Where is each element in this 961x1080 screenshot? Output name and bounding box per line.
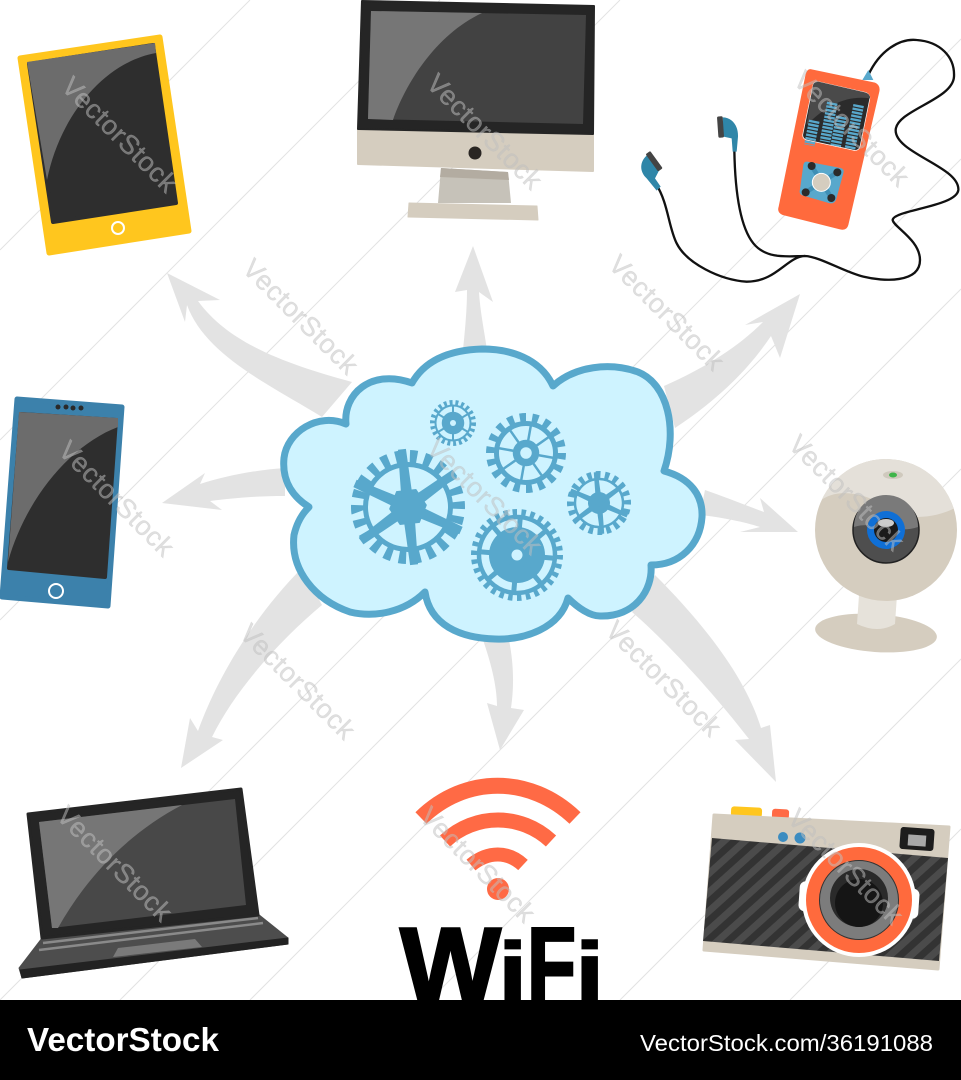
watermarks: VectorStock: [788, 65, 915, 193]
wifi text: i: [575, 926, 604, 1021]
watermarks: VectorStock: [414, 801, 541, 929]
watermarks: VectorStock: [600, 615, 727, 743]
footer logo text: VectorStock: [27, 1021, 220, 1058]
device: laptop: [19, 789, 288, 978]
watermarks: VectorStock: [234, 618, 361, 746]
footer image id: VectorStock.com/36191088: [640, 1030, 933, 1056]
arrow: to monitor: [455, 246, 493, 350]
device: camera: [703, 806, 949, 969]
footer bar: [0, 1000, 961, 1080]
watermarks: VectorStock: [603, 249, 730, 377]
watermarks: VectorStock: [56, 71, 183, 199]
cloud with gears: [284, 349, 702, 639]
wifi symbol and label: [400, 786, 604, 1025]
cloud shape: [284, 349, 702, 639]
wifi text: i: [498, 926, 528, 1021]
watermarks: VectorStock: [421, 68, 548, 196]
watermarks: VectorStock: [782, 803, 909, 931]
device: tablet: [20, 37, 189, 253]
arrow: to tablet: [167, 273, 352, 417]
gear: large: [349, 444, 467, 570]
watermarks: VectorStock: [53, 435, 180, 563]
arrow: to wifi: [483, 640, 524, 750]
arrow: to phone: [162, 468, 285, 510]
earbud left: [641, 155, 661, 191]
device: music player with earphones: [641, 40, 958, 282]
wifi waves: [421, 786, 575, 865]
gear: lower: [474, 512, 560, 598]
wifi text: W: [400, 905, 501, 1025]
watermarks: VectorStock: [421, 433, 548, 561]
arrow: to laptop: [181, 568, 322, 768]
wifi text: [400, 905, 604, 1025]
device: webcam: [814, 450, 960, 656]
device: smartphone: [2, 399, 122, 606]
arrow: to webcam: [700, 490, 798, 532]
gear: upper centre: [491, 418, 561, 488]
arrows radiating from cloud: [162, 246, 800, 782]
watermarks: VectorStock: [51, 800, 178, 928]
gear: right: [568, 469, 630, 537]
earbud right: [723, 117, 738, 152]
device: desktop monitor: [358, 1, 594, 220]
player body: [641, 40, 958, 282]
watermarks: VectorStock: [783, 429, 910, 557]
earphone wires: [656, 40, 958, 282]
watermarks: VectorStock: [237, 253, 364, 381]
arrow: to camera: [632, 575, 776, 782]
gear: small top: [432, 402, 474, 444]
watermarks: [51, 65, 915, 931]
wifi text: F: [527, 905, 576, 1025]
arrow: to music player: [664, 294, 800, 428]
